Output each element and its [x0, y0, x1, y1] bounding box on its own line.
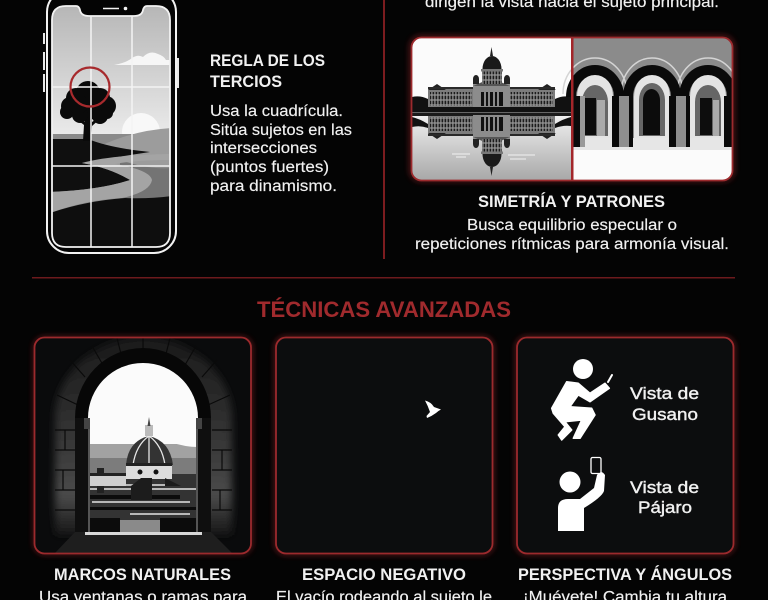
heading: técnicas avanzadas: TÉCNICAS AVANZADAS	[257, 297, 511, 322]
panel border	[517, 338, 734, 554]
phone illustration: rule of thirds	[44, 0, 178, 253]
text block: marcos naturales: MARCOS NATURALES	[54, 565, 231, 584]
text block: marcos naturales	[39, 565, 247, 600]
label: vista de pájaro: Vista de	[630, 478, 699, 497]
panel glow	[276, 338, 492, 554]
label: vista de gusano	[630, 384, 699, 424]
panel glow	[35, 338, 251, 553]
text block: simetría y patrones: repeticiones rítmicas para armonía visual.	[415, 236, 729, 253]
rule of thirds grid	[52, 16, 170, 247]
text block: espacio negativo: ESPACIO NEGATIVO	[302, 565, 466, 584]
dark inner arch	[75, 348, 211, 418]
city	[90, 474, 196, 520]
icon: person raising phone	[558, 458, 605, 531]
text block: regla de los tercios: TERCIOS	[210, 72, 282, 91]
repeating arches	[563, 38, 739, 180]
photo on phone screen	[50, 0, 172, 250]
tree	[60, 81, 116, 141]
winding river	[53, 156, 152, 212]
view through window	[86, 361, 200, 534]
label: vista de gusano: Gusano	[632, 405, 698, 424]
text block: regla de los tercios	[210, 51, 352, 195]
label: vista de pájaro	[630, 478, 699, 517]
text block: regla de los tercios: para dinamismo.	[210, 178, 337, 195]
text block: simetría y patrones: SIMETRÍA Y PATRONES	[478, 192, 665, 211]
symmetric palace with reflection	[412, 38, 572, 180]
cathedral dome	[126, 436, 173, 465]
label: vista de pájaro: Pájaro	[638, 498, 692, 517]
dark jambs	[75, 418, 211, 532]
hills	[52, 134, 170, 212]
text block: perspectiva y ángulos: PERSPECTIVA Y ÁNGULOS	[518, 565, 732, 584]
panel border	[276, 338, 492, 554]
text block: regla de los tercios: intersecciones	[210, 140, 317, 157]
stone arch wall	[55, 338, 232, 535]
panel border	[34, 338, 251, 554]
red focus circle	[70, 68, 110, 106]
text block: simetría y patrones: Busca equilibrio especular o	[467, 217, 677, 234]
phone side buttons	[44, 33, 178, 92]
label: vista de gusano: Vista de	[630, 384, 699, 403]
text block: regla de los tercios: REGLA DE LOS	[210, 51, 325, 70]
panel: marcos naturales	[34, 338, 251, 554]
text block: perspectiva y ángulos	[518, 565, 732, 600]
panel: perspectiva y ángulos	[517, 338, 734, 554]
text block: regla de los tercios: (puntos fuertes)	[210, 159, 329, 176]
lower black land	[52, 196, 170, 246]
text block: simetría y patrones	[415, 192, 729, 253]
arch bands	[563, 58, 739, 94]
arch interiors	[577, 73, 726, 138]
phone speaker and camera	[103, 8, 119, 10]
panel glow	[517, 338, 734, 554]
text block: regla de los tercios: Usa la cuadrícula.	[210, 103, 343, 120]
icon: crouching person	[552, 359, 612, 440]
panel border	[412, 38, 732, 180]
phone frame	[47, 0, 176, 253]
horizontal divider	[32, 277, 735, 278]
text block: regla de los tercios: Sitúa sujetos en las	[210, 122, 352, 139]
image divider	[571, 38, 574, 180]
panel: simetría y patrones image	[411, 37, 739, 180]
panel: espacio negativo	[276, 338, 492, 554]
window sill highlight	[85, 532, 202, 535]
window sill	[56, 534, 232, 552]
piers	[612, 96, 633, 147]
upper black land	[50, 139, 150, 192]
icon: white bird	[425, 400, 441, 418]
panel glow	[411, 37, 733, 180]
vertical divider	[383, 0, 385, 259]
text block: espacio negativo	[276, 565, 492, 600]
